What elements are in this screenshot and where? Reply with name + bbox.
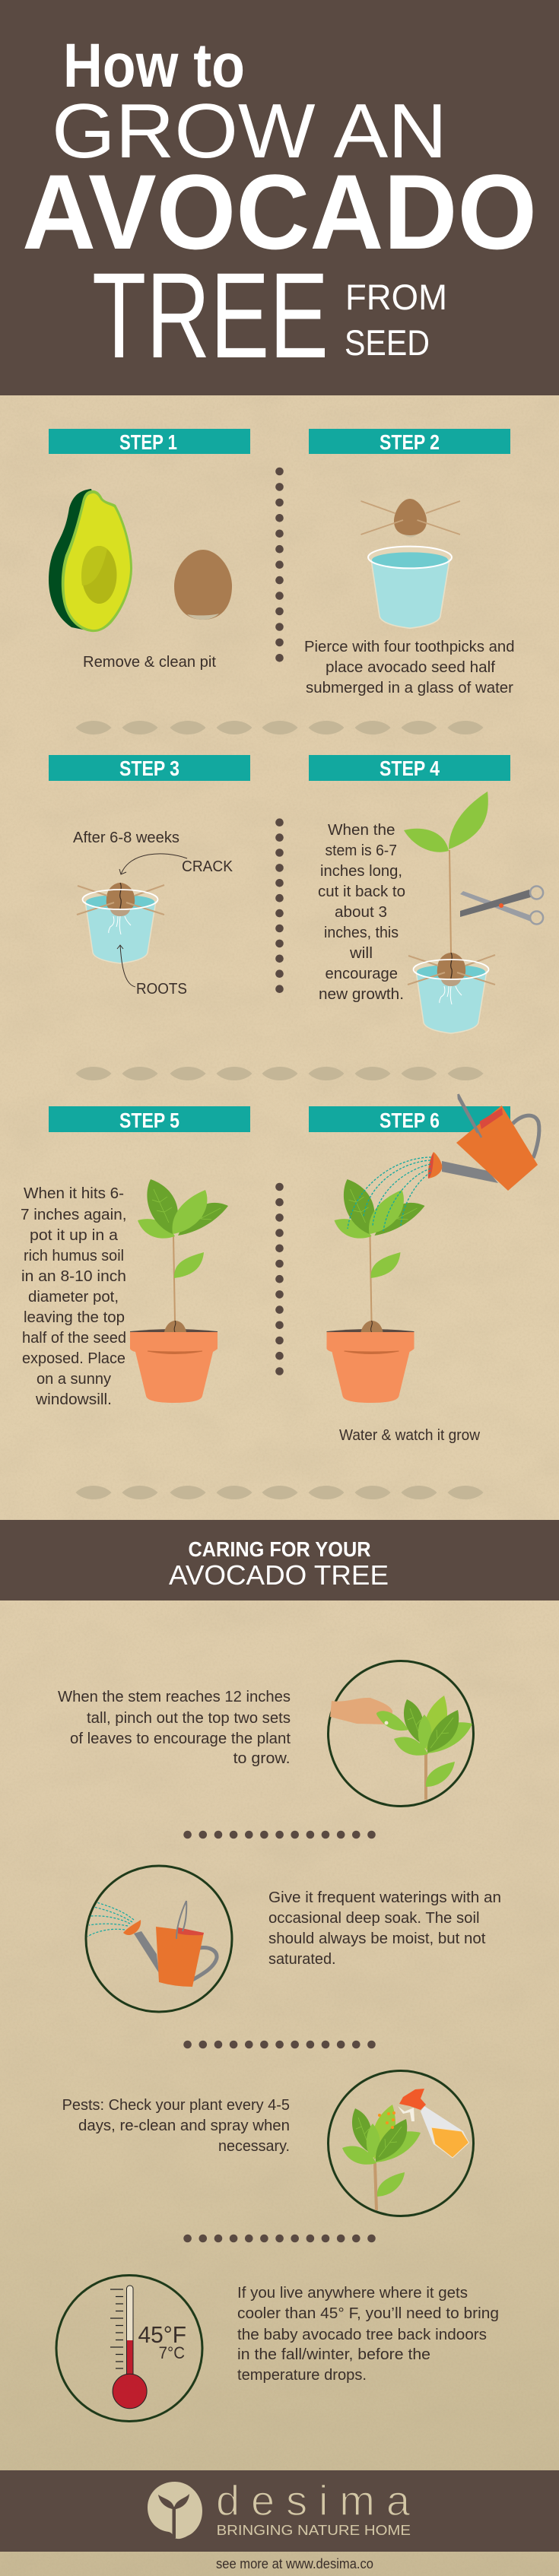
step 5 text: pot it up in a — [30, 1227, 119, 1244]
step 4 text: inches, this — [324, 925, 399, 941]
arrow: crack — [119, 854, 187, 874]
step 5 text: windowsill. — [35, 1391, 112, 1408]
logo wordmark: desima — [216, 2476, 411, 2524]
icon: seed with toothpicks — [360, 499, 460, 537]
step 5 panel — [21, 1106, 250, 1408]
tip 4 text — [237, 2285, 499, 2384]
step 6 caption: Water & watch it grow — [339, 1427, 481, 1444]
label: ROOTS: ROOTS — [136, 981, 187, 998]
step 4 text: will — [349, 945, 373, 962]
tip 2 text: saturated. — [268, 1951, 336, 1968]
title: SEED: SEED — [345, 322, 430, 363]
dotted divider: steps 1-2 — [275, 468, 284, 662]
tip 3 text: days, re-clean and spray when — [78, 2118, 290, 2134]
step 2 heading: STEP 2 — [380, 430, 440, 454]
leaf divider 2 — [76, 1067, 484, 1080]
icon: sprouting seedling in glass — [404, 792, 495, 1033]
tip 1 text: tall, pinch out the top two sets — [87, 1710, 291, 1727]
icon: avocado seed — [174, 550, 232, 620]
dotted divider: steps 5-6 — [275, 1183, 284, 1375]
tip 3 text: Pests: Check your plant every 4-5 — [62, 2097, 290, 2114]
tip 2 text: should always be moist, but not — [268, 1930, 486, 1947]
step 4 text: encourage — [326, 966, 398, 982]
step 5 text: When it hits 6- — [24, 1185, 124, 1202]
step 3 heading — [49, 755, 250, 781]
banner heading: avocado tree: AVOCADO TREE — [169, 1559, 389, 1591]
footer link: see more at www.desima.co — [216, 2556, 373, 2571]
step 5 text: diameter pot, — [28, 1289, 119, 1305]
step 5 text: rich humus soil — [24, 1248, 124, 1264]
tip 1 text: When the stem reaches 12 inches — [58, 1689, 291, 1705]
tip 2 text: Give it frequent waterings with an — [268, 1889, 501, 1906]
step 4 text: When the — [328, 822, 395, 839]
tip 4 text: If you live anywhere where it gets — [237, 2285, 468, 2302]
step 6 heading — [309, 1106, 510, 1132]
icon: spray bottle and plant in circle — [329, 2071, 473, 2216]
icon: potted plant — [130, 1179, 228, 1403]
icon: cracked seed in glass — [77, 883, 164, 963]
care tip 3: pests — [62, 2071, 474, 2216]
tip 4 text: cooler than 45° F, you’ll need to bring — [237, 2305, 499, 2322]
step 5 heading: STEP 5 — [119, 1109, 179, 1132]
step 1 heading — [49, 429, 250, 454]
tip 4 text: temperature drops. — [237, 2367, 367, 2384]
step 2 panel — [304, 429, 514, 696]
step 3 caption: After 6-8 weeks — [73, 830, 179, 846]
title: TREE: TREE — [92, 247, 329, 383]
icon: hand pinching plant in circle — [329, 1661, 473, 1807]
section banner: caring — [0, 1520, 559, 1600]
banner heading: caring for your: CARING FOR YOUR — [189, 1537, 371, 1561]
title: FROM: FROM — [345, 277, 447, 317]
step 6 panel — [309, 1094, 539, 1444]
tip 1 text: to grow. — [233, 1750, 291, 1767]
step 5 text: leaving the top — [24, 1309, 125, 1326]
logo tagline: BRINGING NATURE HOME — [217, 2523, 411, 2538]
step 6 heading: STEP 6 — [380, 1109, 440, 1132]
icon: thermometer in circle — [56, 2275, 202, 2421]
icon: scissors — [460, 887, 543, 925]
step 2 caption: Pierce with four toothpicks and — [304, 639, 514, 655]
step 5 text — [21, 1185, 126, 1408]
label: 7°C: 7°C — [159, 2343, 185, 2362]
title: GROW AN: GROW AN — [52, 89, 447, 174]
icon: glass of water — [368, 547, 452, 628]
label: CRACK: CRACK — [182, 858, 233, 875]
care tip 1: pinching — [58, 1661, 473, 1807]
tip 3 text — [62, 2097, 290, 2155]
step 4 text: cut it back to — [318, 884, 405, 900]
dotted divider: tips 2-3 — [183, 2041, 376, 2048]
tip 1 text — [58, 1689, 291, 1767]
step 4 text: stem is 6-7 — [326, 842, 397, 859]
tip 3 text: necessary. — [218, 2138, 290, 2155]
step 1 heading: STEP 1 — [119, 430, 177, 454]
step 5 text: in an 8-10 inch — [21, 1268, 126, 1285]
step 2 caption: submerged in a glass of water — [306, 680, 513, 696]
step 2 heading — [309, 429, 510, 454]
step 4 text: inches long, — [320, 863, 402, 880]
step 3 heading: STEP 3 — [119, 757, 179, 780]
step 4 text: about 3 — [335, 904, 387, 921]
dotted divider: tips 3-4 — [183, 2235, 376, 2242]
logo: seed with sprout — [148, 2482, 202, 2539]
step 1 caption: Remove & clean pit — [83, 654, 216, 671]
step 3 panel — [49, 755, 250, 998]
tip 2 text: occasional deep soak. The soil — [268, 1910, 479, 1927]
icon: avocado half — [49, 489, 132, 632]
step 4 heading: STEP 4 — [380, 757, 440, 780]
step 2 caption: place avocado seed half — [326, 659, 495, 676]
dotted divider: steps 3-4 — [275, 818, 284, 993]
step 5 text: 7 inches again, — [21, 1207, 126, 1223]
tip 4 text: the baby avocado tree back indoors — [237, 2327, 487, 2343]
title: How to: How to — [63, 31, 245, 100]
step 1 panel — [49, 429, 250, 671]
water spray — [348, 1157, 431, 1231]
title: AVOCADO: AVOCADO — [22, 152, 537, 271]
icon: watering can in circle — [86, 1866, 232, 2012]
step 5 heading — [49, 1106, 250, 1132]
step 4 heading — [309, 755, 510, 781]
icon: watering can — [428, 1094, 539, 1191]
label: 45°F: 45°F — [138, 2321, 186, 2348]
step 5 text: exposed. Place — [22, 1350, 125, 1367]
tip 1 text: of leaves to encourage the plant — [70, 1731, 291, 1747]
header panel — [0, 0, 559, 395]
step 2 caption — [304, 639, 514, 696]
care tip 2: watering — [86, 1866, 501, 2012]
leaf divider 1 — [76, 721, 484, 734]
footer band — [0, 2470, 559, 2552]
step 4 panel — [309, 755, 543, 1033]
tip 4 text: in the fall/winter, before the — [237, 2346, 430, 2363]
icon: potted plant being watered — [327, 1179, 424, 1403]
step 5 text: on a sunny — [37, 1371, 111, 1388]
arrow: roots — [117, 945, 135, 987]
step 4 text: new growth. — [319, 986, 404, 1003]
leaf divider 3 — [76, 1486, 484, 1499]
dotted divider: tips 1-2 — [183, 1831, 376, 1838]
care tip 4: temperature — [56, 2275, 499, 2421]
tip 2 text — [268, 1889, 501, 1968]
step 4 text — [318, 822, 405, 1003]
step 5 text: half of the seed — [22, 1330, 126, 1347]
